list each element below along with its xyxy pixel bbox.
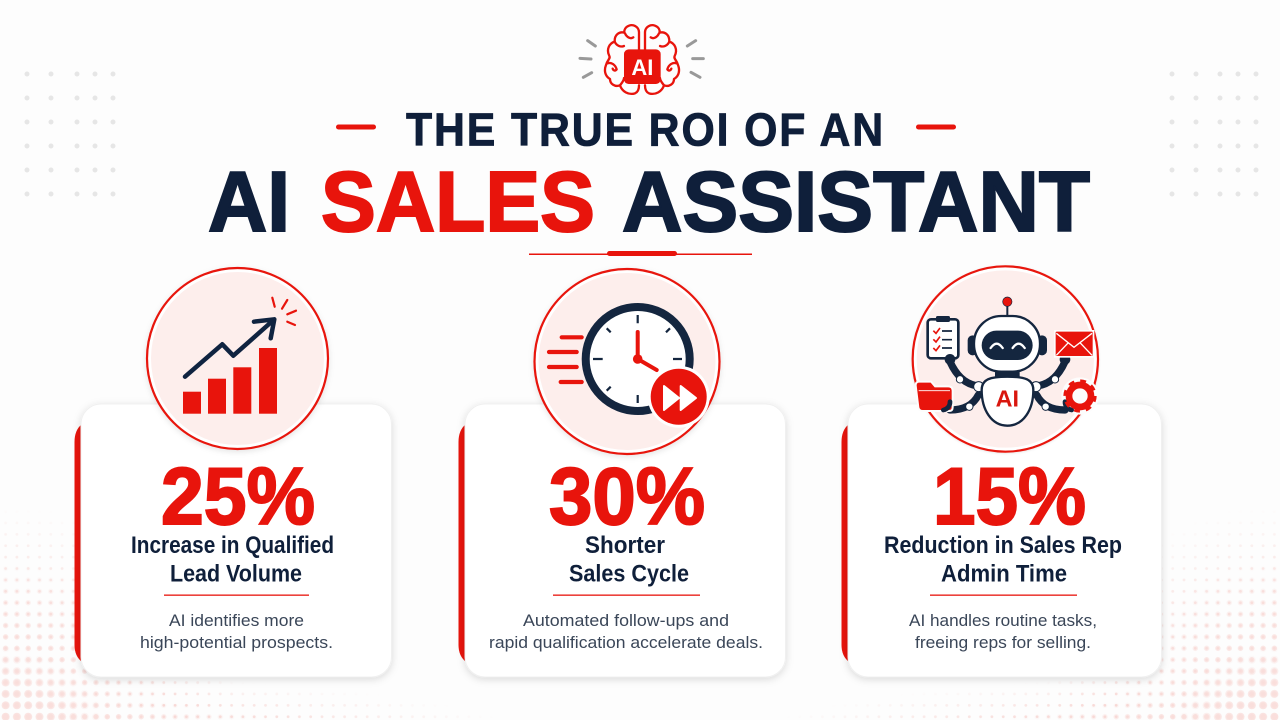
card accent bar	[842, 424, 849, 662]
heading: Reduction in Sales Rep	[884, 532, 1122, 559]
stat: 15%: 15%	[933, 452, 1086, 542]
right title dash	[916, 124, 956, 130]
icon: fast clock	[534, 269, 720, 454]
heading: Lead Volume	[170, 560, 302, 588]
icon: AI brain logo: AI	[631, 55, 653, 80]
heading	[131, 532, 334, 588]
panel: lead volume	[74, 268, 392, 677]
heading: Shorter	[585, 532, 665, 559]
title	[208, 104, 1090, 256]
panel: sales cycle	[458, 269, 786, 677]
card accent bar	[74, 424, 82, 662]
heading: Increase in Qualified	[131, 532, 334, 559]
card accent bar	[458, 424, 466, 662]
panel: admin time	[842, 266, 1162, 677]
title line two: SALES	[321, 155, 595, 250]
description: rapid qualification accelerate deals.	[489, 633, 763, 652]
icon: rising bar chart	[147, 268, 328, 449]
title line two	[208, 155, 1090, 250]
card background	[848, 404, 1162, 677]
description: Automated follow-ups and	[523, 611, 729, 630]
icon: multitasking robot: AI	[996, 386, 1019, 412]
description	[489, 611, 763, 652]
title line one: THE TRUE ROI OF AN	[406, 104, 885, 156]
title line two: ASSISTANT	[622, 155, 1090, 250]
card background	[465, 404, 786, 677]
stat: 30%: 30%	[549, 452, 705, 542]
description: AI handles routine tasks,	[909, 611, 1097, 630]
description	[909, 611, 1097, 652]
heading: Sales Cycle	[569, 560, 689, 588]
heading	[569, 532, 689, 588]
heading	[884, 532, 1122, 588]
description: high-potential prospects.	[140, 633, 333, 652]
title line two: AI	[208, 155, 290, 250]
heading: Admin Time	[941, 560, 1067, 588]
left title dash	[336, 124, 376, 130]
stat: 25%: 25%	[161, 452, 315, 542]
description: AI identifies more	[169, 611, 304, 630]
icon: AI brain logo	[580, 25, 703, 94]
card background	[81, 404, 392, 677]
title divider	[529, 251, 752, 256]
description	[140, 611, 333, 652]
icon: multitasking robot	[913, 266, 1099, 452]
description: freeing reps for selling.	[915, 633, 1091, 652]
